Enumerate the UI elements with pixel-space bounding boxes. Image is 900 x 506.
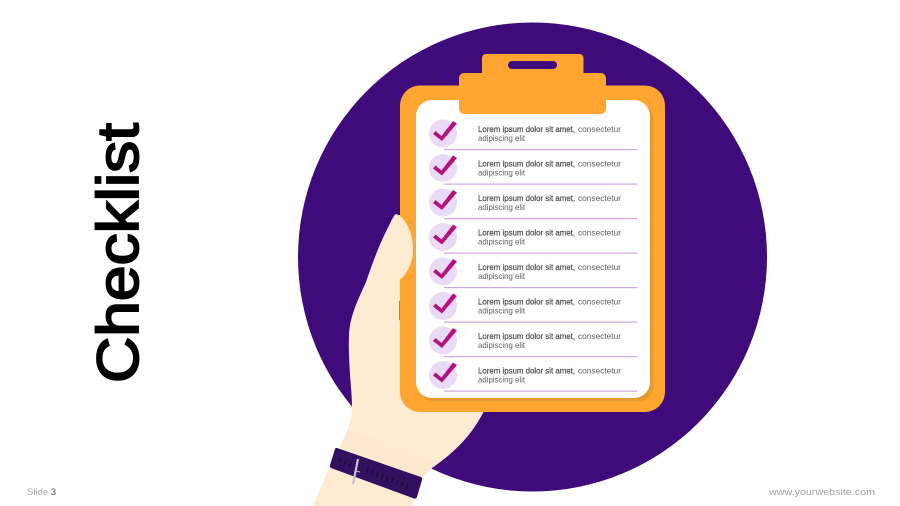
hand — [313, 215, 484, 506]
row 3 — [429, 188, 637, 219]
clip upper — [482, 54, 584, 84]
row 2: adipiscing elit — [478, 168, 526, 178]
clip slot — [508, 61, 557, 69]
row 3: consectetur — [578, 193, 621, 203]
row 1: Lorem ipsum dolor sit amet, — [478, 124, 575, 134]
paper shadow — [419, 103, 654, 402]
strap holes — [340, 458, 408, 489]
buckle — [353, 459, 358, 484]
thumb — [376, 214, 413, 282]
row 3: Lorem ipsum dolor sit amet, — [478, 193, 575, 203]
row 6: consectetur — [578, 296, 621, 306]
slide number: Slide 3 — [27, 487, 56, 498]
row 2 — [429, 154, 637, 185]
row 7: Lorem ipsum dolor sit amet, — [478, 331, 575, 341]
row 5: Lorem ipsum dolor sit amet, — [478, 262, 575, 272]
row 7 — [429, 326, 637, 357]
purple circle — [298, 22, 767, 492]
row 3: adipiscing elit — [478, 202, 526, 212]
wrist shading — [339, 428, 437, 478]
row 1 — [429, 120, 637, 150]
row 4 — [429, 223, 637, 254]
clipboard — [400, 54, 665, 412]
row 8: adipiscing elit — [478, 374, 526, 384]
paper — [416, 100, 650, 398]
website: www.yourwebsite.com — [768, 487, 875, 498]
row 5: consectetur — [578, 262, 621, 272]
title: Checklist — [86, 123, 151, 383]
row 2: consectetur — [578, 158, 621, 168]
row 2: Lorem ipsum dolor sit amet, — [478, 158, 575, 168]
row 4: consectetur — [578, 228, 621, 238]
row 8: consectetur — [578, 366, 621, 376]
clipboard board — [400, 86, 665, 412]
row 7: adipiscing elit — [478, 340, 526, 350]
row 8: Lorem ipsum dolor sit amet, — [478, 366, 575, 376]
buckle pin — [355, 471, 360, 472]
row 7: consectetur — [578, 331, 621, 341]
row 1: consectetur — [578, 124, 621, 134]
row 5 — [429, 258, 637, 288]
row 6 — [429, 292, 637, 323]
row 1: adipiscing elit — [478, 133, 526, 143]
watch strap — [330, 448, 422, 499]
row 5: adipiscing elit — [478, 271, 526, 281]
row 4: Lorem ipsum dolor sit amet, — [478, 228, 575, 238]
row 8 — [429, 361, 637, 392]
clip lower — [459, 73, 606, 114]
row 4: adipiscing elit — [478, 236, 526, 246]
row 6: Lorem ipsum dolor sit amet, — [478, 296, 575, 306]
row 6: adipiscing elit — [478, 306, 526, 316]
